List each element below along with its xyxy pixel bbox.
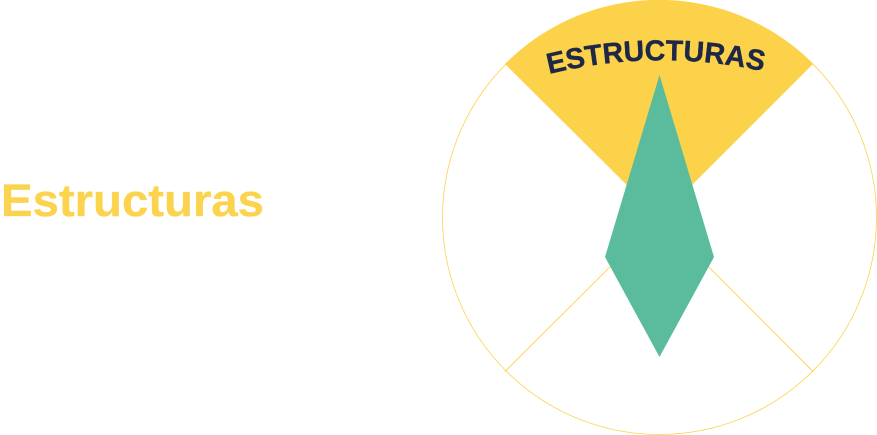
wheel outline <box>442 0 876 434</box>
wheel divider lines <box>505 218 813 372</box>
heading: Estructuras: Estructuras <box>1 175 264 226</box>
compass needle diamond <box>605 75 714 357</box>
wheel diagram <box>442 0 877 435</box>
curved label: ESTRUCTURAS: ESTRUCTURAS <box>546 40 765 74</box>
highlighted sector: estructuras <box>505 0 813 218</box>
